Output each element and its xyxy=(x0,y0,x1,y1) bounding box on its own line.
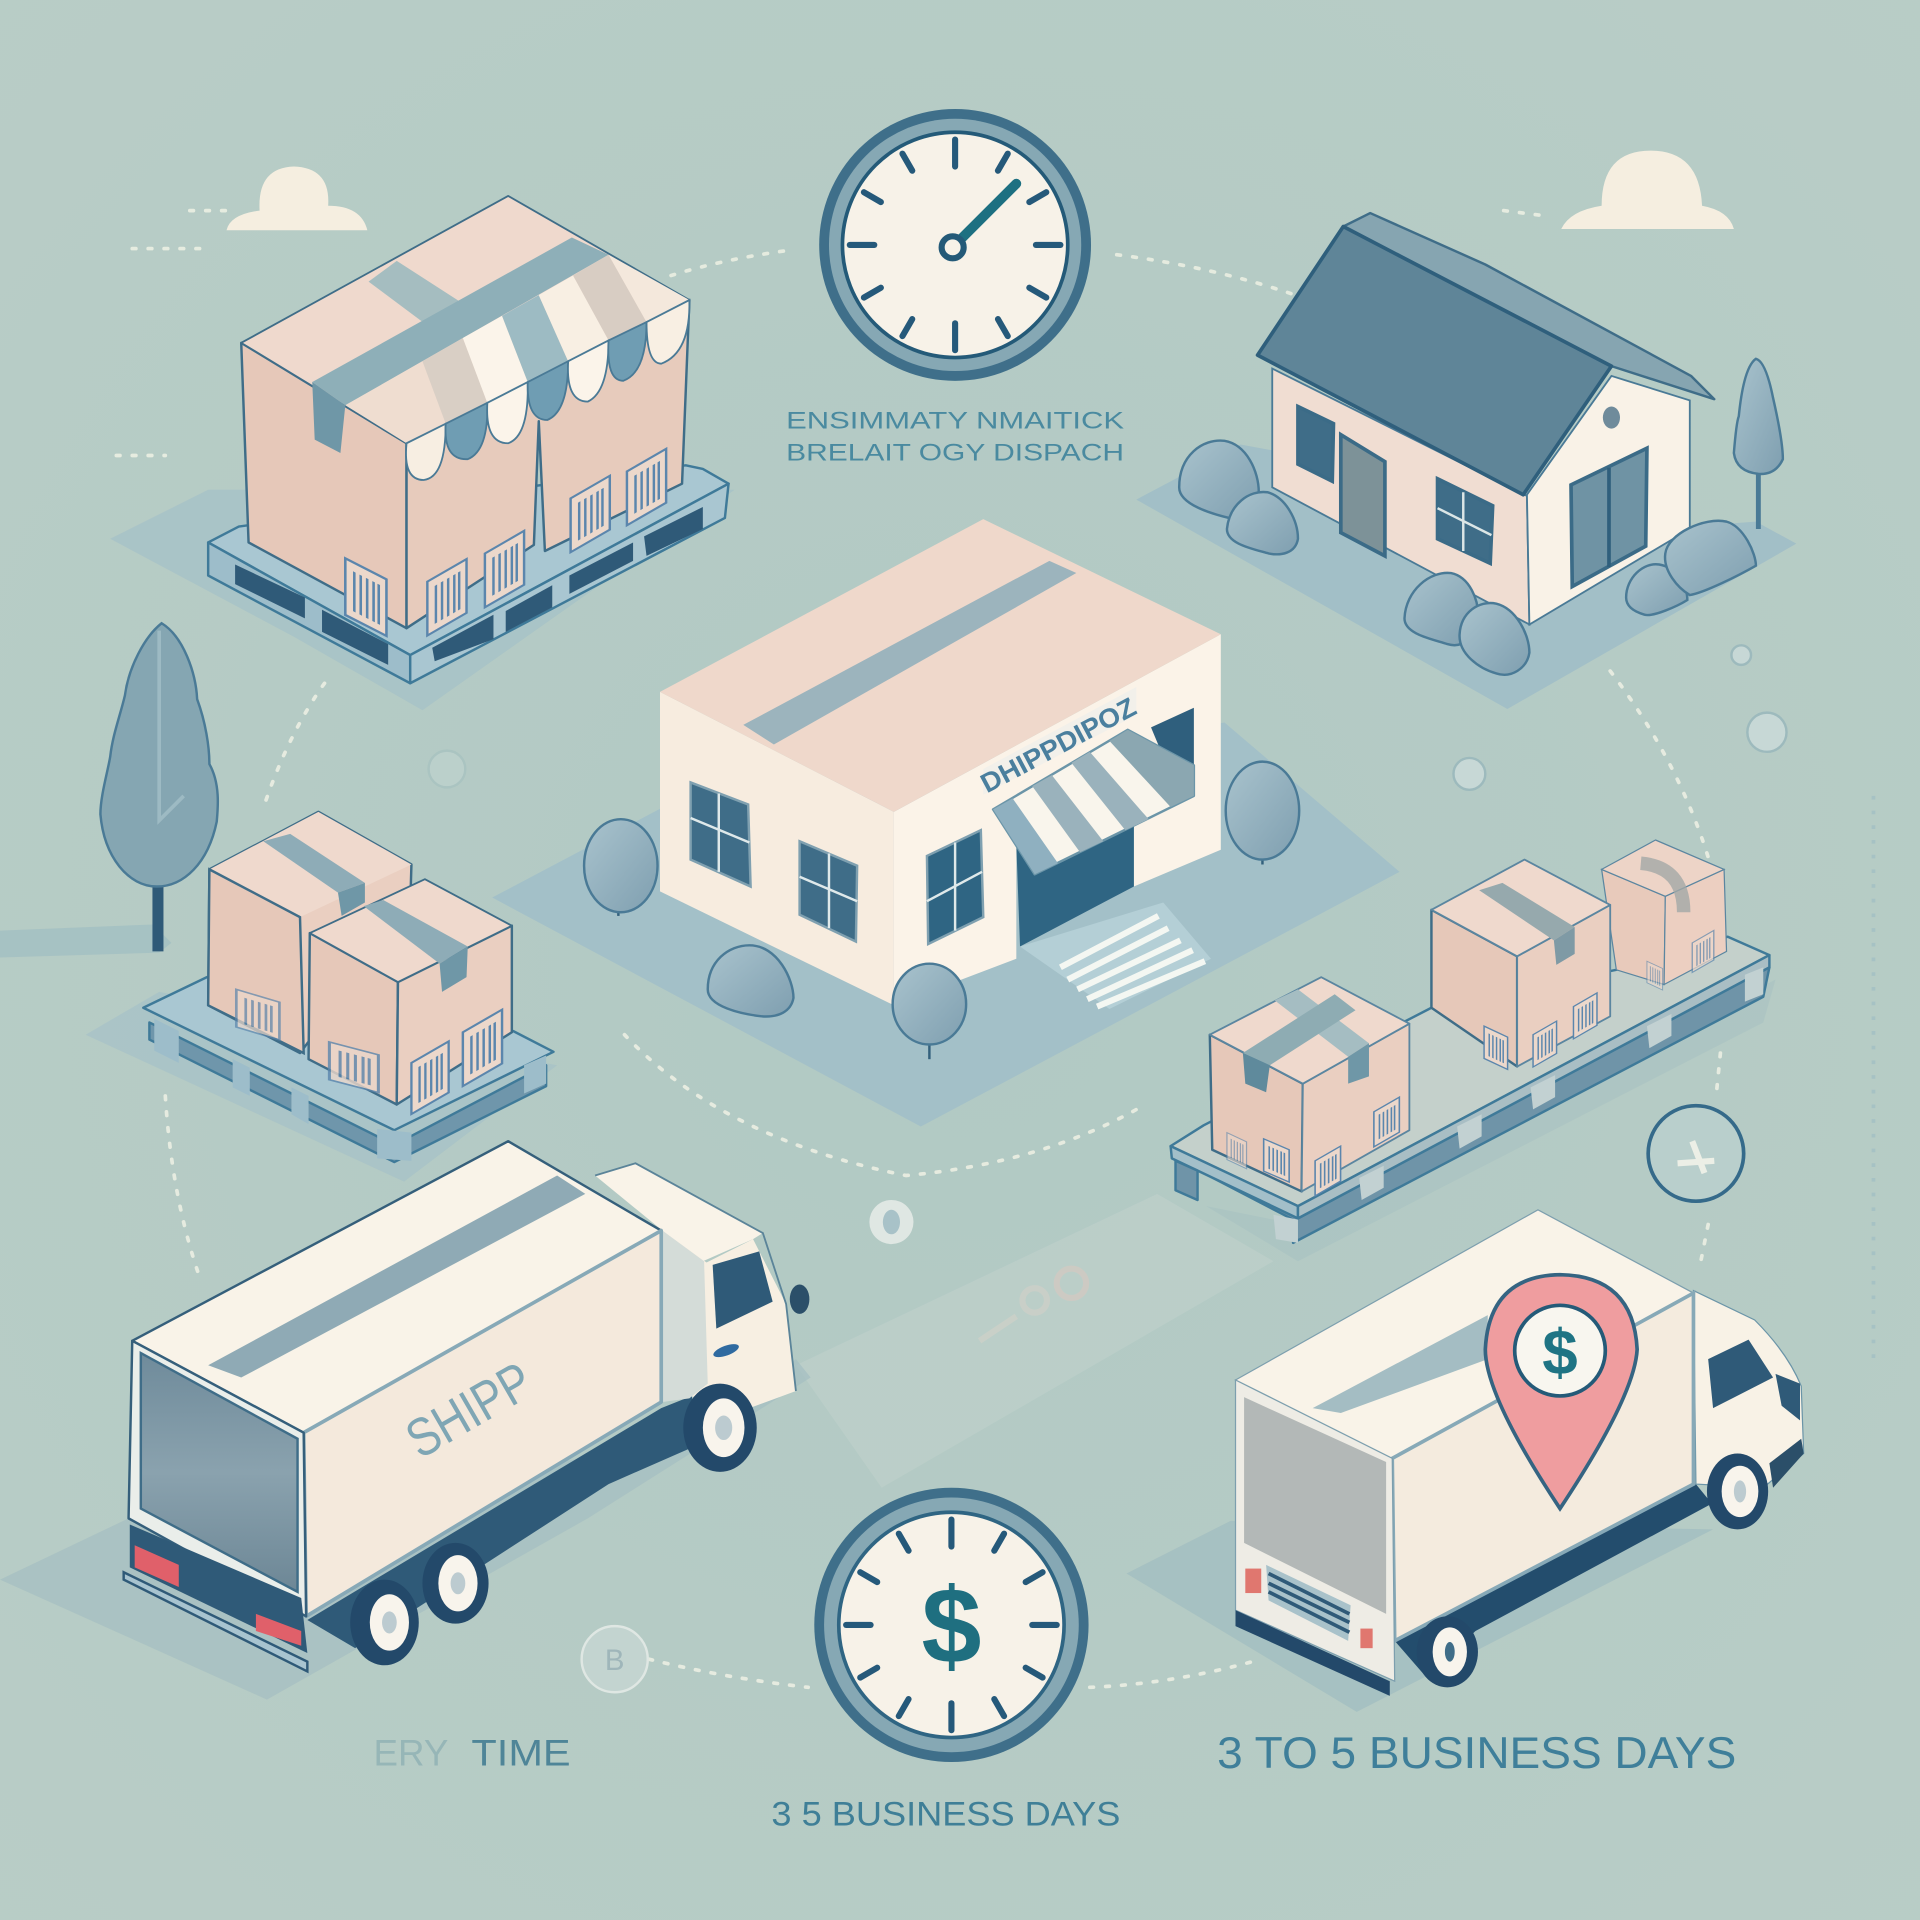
label: 3 to 5 business days: 3 TO 5 BUSINESS DAYS xyxy=(1217,1729,1736,1778)
box faces xyxy=(241,343,407,628)
tree xyxy=(1734,359,1783,529)
back box xyxy=(1602,869,1665,984)
cargo box xyxy=(132,1141,661,1433)
roof xyxy=(660,519,1221,812)
left tree xyxy=(0,623,218,958)
shrubs xyxy=(584,762,1299,1059)
rear shutter xyxy=(141,1353,298,1592)
faint road band xyxy=(796,1194,1273,1488)
right pallet with three boxes xyxy=(1171,840,1776,1261)
faded decorative markers xyxy=(429,645,1787,790)
clock: dollar delivery cost xyxy=(814,1488,1089,1762)
barcode labels xyxy=(345,558,386,636)
chassis xyxy=(307,1396,698,1648)
pallet xyxy=(208,465,729,683)
icon: small coin bottom xyxy=(582,1626,648,1692)
shadow xyxy=(1127,1521,1713,1712)
wheels xyxy=(350,1384,757,1665)
icon: location pin with dollar xyxy=(1485,1275,1637,1509)
front box xyxy=(309,933,398,1104)
shadow xyxy=(0,1359,811,1700)
steps xyxy=(1020,902,1211,1009)
wheels xyxy=(1417,1453,1768,1687)
rear box xyxy=(208,812,411,1053)
door xyxy=(1341,435,1385,556)
label: dispatch text: BRELAIT OGY DISPACH xyxy=(786,439,1124,466)
central shipping building xyxy=(492,519,1400,1127)
truck lettering: SHIPP xyxy=(396,1351,543,1470)
icon: small coin bottom: B xyxy=(605,1644,624,1677)
front box xyxy=(1210,1035,1303,1191)
clock hand xyxy=(953,184,1016,247)
walls xyxy=(660,692,894,1005)
package on pallet xyxy=(110,196,735,710)
cab xyxy=(1693,1291,1804,1488)
delivery van with price pin xyxy=(1127,1210,1804,1712)
cab xyxy=(595,1163,763,1261)
mirror xyxy=(790,1284,809,1314)
rear bumper and lights xyxy=(124,1524,307,1671)
icon: location pin with dollar: $ xyxy=(1542,1317,1578,1388)
shipping truck xyxy=(0,1141,811,1700)
windows xyxy=(1298,407,1647,587)
left pallet with two boxes xyxy=(86,812,557,1182)
rear panel xyxy=(1244,1397,1386,1614)
cab window xyxy=(713,1251,773,1329)
bushes xyxy=(1179,441,1756,675)
icon: round badge right xyxy=(1648,1106,1744,1201)
clock: dispatch time xyxy=(819,109,1091,381)
icon: small coin centre xyxy=(869,1200,913,1244)
icon: right cloud xyxy=(1561,151,1734,229)
label: 3 5 business days: 3 5 BUSINESS DAYS xyxy=(771,1796,1120,1834)
label: dispatch text: ENSIMMATY NMAITICK xyxy=(786,408,1125,435)
grille xyxy=(1245,1565,1373,1648)
cargo box xyxy=(1236,1210,1693,1458)
tape xyxy=(369,261,490,343)
pallet xyxy=(143,977,553,1162)
awning stripes xyxy=(345,255,689,480)
house xyxy=(1136,213,1796,709)
door xyxy=(1016,784,1134,947)
ground xyxy=(492,722,1400,1127)
ground xyxy=(1136,444,1796,709)
faded road marker xyxy=(980,1269,1086,1341)
label: dispatch text xyxy=(786,408,1125,466)
label: delivery time: ERY xyxy=(373,1733,448,1774)
label: delivery time: TIME xyxy=(471,1733,571,1774)
icon: left cloud xyxy=(227,167,367,230)
walls xyxy=(1272,369,1529,624)
awning xyxy=(993,730,1194,874)
roof xyxy=(1343,213,1714,399)
dollar sign: $ xyxy=(921,1565,981,1686)
middle box xyxy=(1431,910,1517,1067)
sign: DHIPPDIPOZ xyxy=(976,692,1141,799)
windows xyxy=(691,782,983,944)
